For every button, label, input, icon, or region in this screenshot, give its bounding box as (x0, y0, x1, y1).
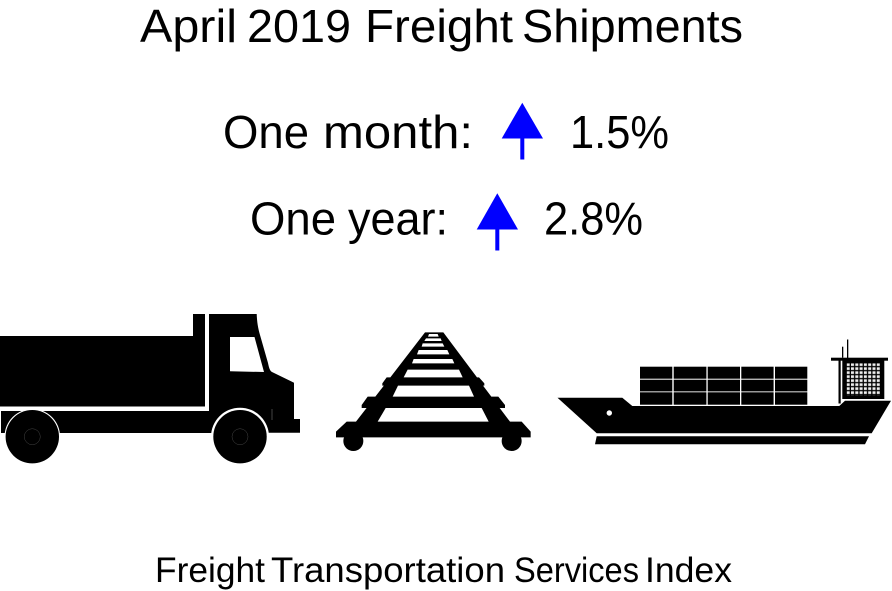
one year value: 2.8% (544, 192, 643, 244)
one year label: One (250, 192, 336, 244)
porthole (607, 410, 612, 416)
title: Freight (365, 0, 513, 52)
one month label: One (223, 106, 309, 158)
icon: railroad track (336, 332, 531, 451)
icon: one year up arrow (477, 193, 518, 250)
one month label: month: (323, 106, 473, 158)
containers (640, 367, 807, 405)
bridge tower (842, 360, 884, 399)
icon: truck (0, 314, 300, 466)
footer caption: Transportation (271, 551, 505, 590)
hull (558, 398, 891, 433)
footer caption: Services (514, 551, 639, 590)
title: 2019 (247, 0, 351, 52)
one year label: year: (348, 192, 448, 244)
title: April (140, 0, 237, 52)
footer caption: Index (645, 551, 733, 590)
footer caption: Freight (155, 551, 265, 590)
title: Shipments (522, 0, 743, 52)
icon: one month up arrow (502, 103, 543, 160)
one month value: 1.5% (570, 106, 669, 158)
icon: container ship (558, 340, 891, 444)
waterline stripe (595, 436, 869, 444)
